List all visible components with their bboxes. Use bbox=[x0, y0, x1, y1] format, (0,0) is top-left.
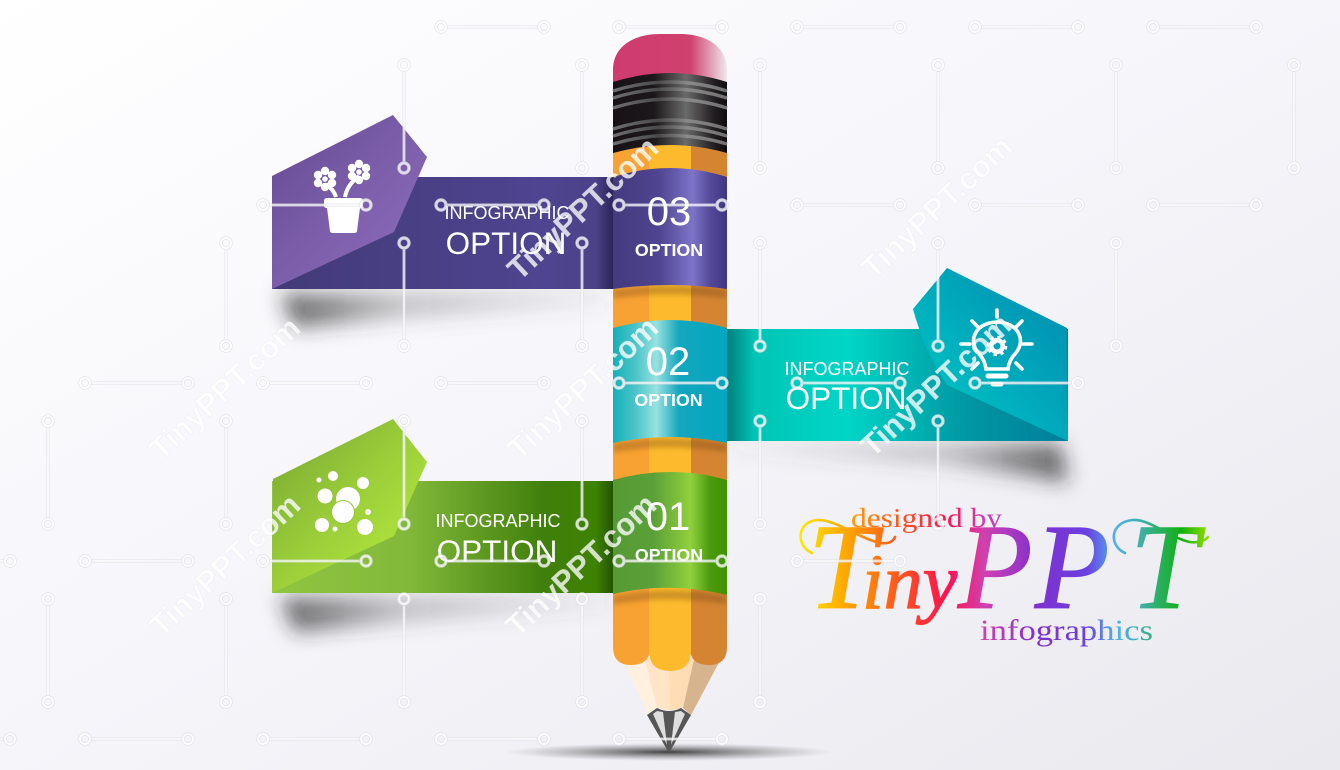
watermarks: TinyPPT.com bbox=[854, 307, 1018, 464]
ribbon 01 label: INFOGRAPHIC bbox=[435, 511, 561, 531]
ribbon 02 label: INFOGRAPHIC bbox=[784, 359, 910, 379]
ribbon 02 flap bbox=[913, 268, 1068, 441]
ribbon 02 strip bbox=[727, 329, 1068, 441]
logo bbox=[801, 500, 1208, 647]
ribbon 03 label: INFOGRAPHIC bbox=[444, 203, 570, 223]
ribbon 03 band bbox=[613, 168, 727, 289]
icon: bubbles bbox=[315, 471, 373, 535]
ribbon 01 bbox=[272, 419, 727, 595]
ribbon 03 number: OPTION bbox=[635, 240, 703, 260]
ribbon 02 number: 02 bbox=[646, 340, 690, 384]
watermarks: TinyPPT.com bbox=[143, 487, 307, 644]
pencil lead bbox=[647, 708, 691, 753]
ribbon 01 label bbox=[435, 511, 561, 569]
shadow: ribbon 02 bbox=[730, 444, 1068, 482]
logo: TinyPPT: P bbox=[957, 500, 1033, 635]
ribbon 02 band bbox=[613, 320, 727, 443]
ribbon 03 flap bbox=[272, 115, 427, 289]
ribbon 01 strip bbox=[272, 481, 613, 593]
watermarks bbox=[143, 129, 1019, 644]
shadow: ribbon 01 bbox=[280, 594, 610, 632]
logo: TinyPPT: P bbox=[1034, 500, 1110, 635]
pencil eraser bbox=[613, 34, 727, 84]
shadow: pencil on ground bbox=[504, 743, 834, 761]
ribbon 03 label bbox=[444, 203, 570, 261]
icon: flower pot bbox=[314, 160, 370, 233]
pencil body bbox=[613, 140, 727, 671]
logo: infographics: infographics bbox=[980, 614, 1153, 647]
ribbon 03 strip bbox=[272, 177, 613, 289]
logo: TinyPPT: T bbox=[1130, 500, 1206, 635]
ribbon 03 label: OPTION bbox=[446, 225, 566, 261]
shadows on wood bbox=[613, 286, 727, 604]
ribbon 01 number: OPTION bbox=[635, 545, 703, 565]
ribbon 02 label bbox=[784, 359, 910, 416]
icon: light bulb bbox=[961, 310, 1032, 384]
ribbon 02 number: OPTION bbox=[634, 390, 703, 410]
watermarks: TinyPPT.com bbox=[501, 130, 665, 287]
pencil bbox=[613, 34, 727, 753]
logo: swash strokes bbox=[801, 520, 1208, 553]
ribbon 02 number bbox=[634, 340, 703, 410]
watermarks: TinyPPT.com bbox=[143, 310, 307, 467]
ribbon 03 number: 03 bbox=[647, 190, 691, 234]
ribbon 02 bbox=[613, 268, 1068, 443]
logo: TinyPPT: iny bbox=[862, 538, 958, 625]
ribbon 01 number: 01 bbox=[646, 495, 690, 539]
ribbon 03 bbox=[272, 115, 727, 289]
logo: designed by: designed by bbox=[851, 503, 1003, 533]
ribbon 01 number bbox=[635, 495, 703, 565]
ribbon 01 flap bbox=[272, 419, 427, 593]
watermarks: TinyPPT.com bbox=[855, 129, 1019, 286]
logo: TinyPPT: T bbox=[808, 500, 884, 635]
watermarks: TinyPPT.com bbox=[501, 310, 665, 467]
ribbon 01 label: OPTION bbox=[437, 533, 557, 569]
shadow: ribbon 03 bbox=[280, 290, 610, 328]
pencil wood tip bbox=[621, 655, 723, 715]
watermarks: TinyPPT.com bbox=[499, 487, 663, 644]
pencil ferrule bbox=[613, 73, 727, 153]
ribbon 01 band bbox=[613, 472, 727, 595]
ribbon 03 number bbox=[635, 190, 703, 260]
ribbon 02 label: OPTION bbox=[786, 380, 906, 416]
